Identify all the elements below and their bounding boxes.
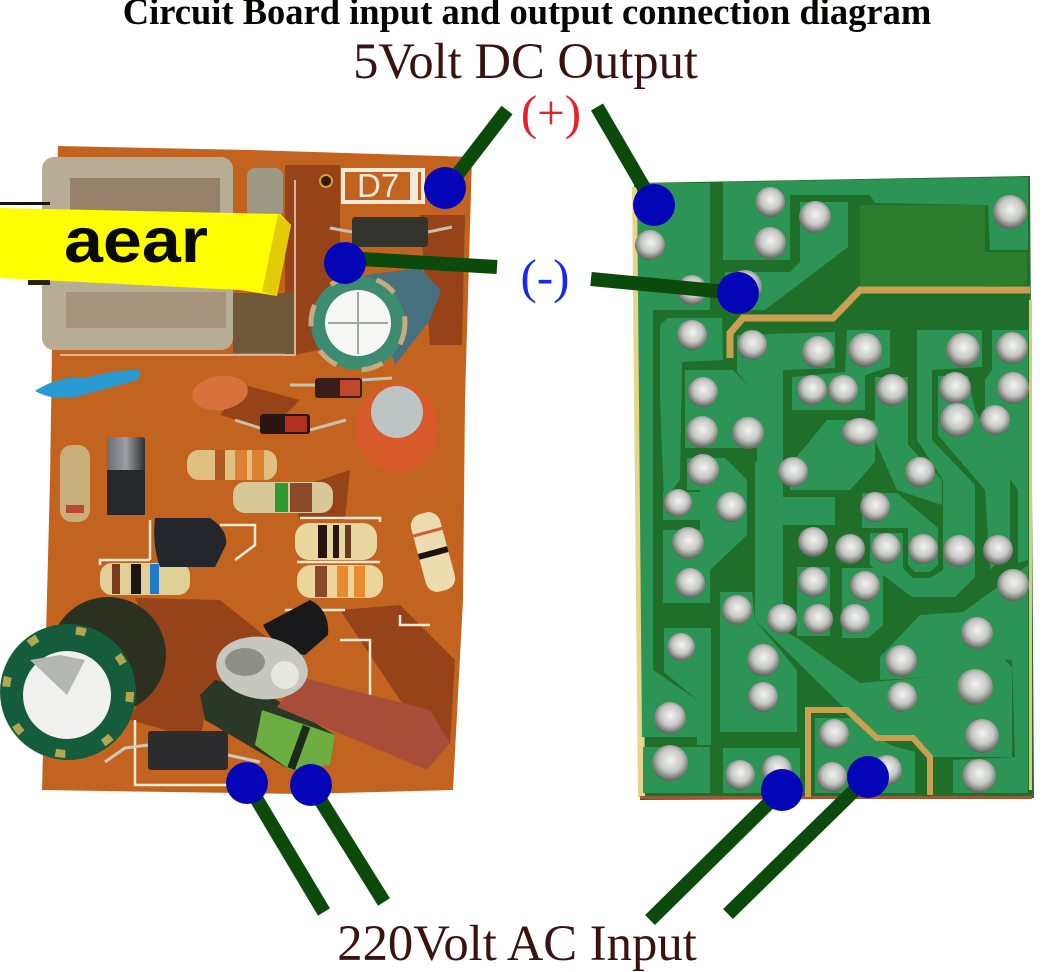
resistors (60, 437, 458, 598)
transformer (42, 157, 295, 355)
output heading: 5Volt DC Output (353, 33, 698, 89)
negative label: (-) (521, 249, 569, 304)
input connection wires (247, 777, 868, 920)
upper dark ground plane (860, 205, 1027, 290)
brand label (0, 202, 291, 296)
output connection wires (345, 107, 738, 293)
inductor (200, 680, 335, 770)
brown capacitor (277, 677, 450, 770)
positive label: (+) (521, 85, 581, 140)
small diodes (235, 378, 392, 434)
blue ceramic capacitor (35, 370, 140, 398)
pcb substrate (634, 176, 1034, 800)
transistors (154, 518, 328, 655)
silk label D7: D7 (357, 167, 399, 204)
top diode (330, 217, 452, 247)
left circuit board (0, 146, 472, 794)
board substrate (42, 146, 472, 794)
capacitor top (311, 268, 441, 370)
LED (212, 631, 312, 705)
input heading: 220Volt AC Input (337, 915, 697, 971)
right circuit board (632, 176, 1034, 800)
connection dots (226, 167, 889, 811)
capacitor orange (356, 383, 438, 473)
silk label D7 (320, 167, 423, 204)
copper traces (730, 290, 1030, 358)
orange capacitor (190, 372, 250, 414)
large capacitor bottom left (0, 597, 166, 760)
silk outlines (100, 518, 430, 785)
board shadows (130, 165, 465, 745)
copper pads (637, 177, 1028, 793)
bottom diode (105, 731, 260, 770)
brand label: aear (64, 206, 208, 276)
solder joints (635, 187, 1029, 793)
